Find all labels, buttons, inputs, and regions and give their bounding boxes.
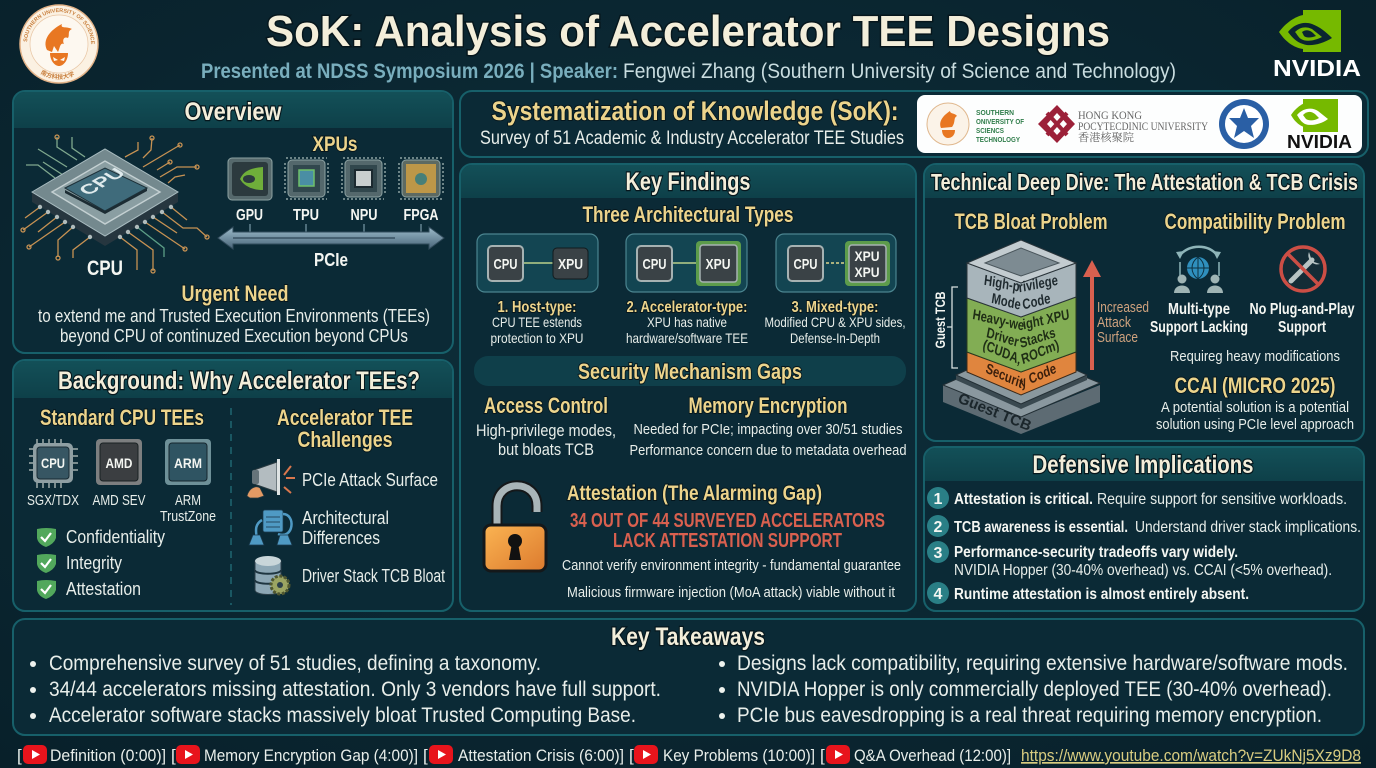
- item 3: Performance-security tradeoffs vary widely.: [954, 544, 1238, 561]
- right bullets: PCIe bus eavesdropping is a real threat requiring memory encryption.: [737, 704, 1322, 727]
- icon: NPU: [342, 158, 385, 199]
- logo: NVIDIA: [1273, 10, 1361, 81]
- diagram: accelerator-type: XPU: [706, 256, 730, 273]
- text: urgent need body: to extend me and Trusted Execution Environments (TEEs): [38, 306, 430, 326]
- labels: CPU TEEs: [27, 492, 216, 525]
- panel: technical deep dive: [923, 163, 1365, 442]
- diagram: TCB stack: Driver Stacks: [986, 327, 1056, 348]
- subtitle: Presented at NDSS Symposium 2026 | Speaker:: [201, 60, 618, 83]
- icon: multi-type support: [1174, 247, 1223, 293]
- icon: CPU chip: CPU: [74, 166, 131, 198]
- diagram: mixed-type: [776, 234, 896, 292]
- item 4: 4: [934, 586, 943, 603]
- text: no plug-and-play: Support: [1278, 319, 1327, 336]
- logo strip: NVIDIA: [1287, 132, 1352, 152]
- text: driver stack TCB bloat: Driver Stack TCB Bloat: [302, 566, 445, 586]
- band: security mechanism gaps: Security Mechanism Gaps: [578, 359, 802, 384]
- callout: 34 of 44: [570, 510, 885, 552]
- video chapters: Attestation Crisis (6:00)]: [458, 746, 624, 765]
- logo strip: SCIENCS: [976, 128, 1004, 135]
- diagram: TCB stack: Security Code: [986, 364, 1056, 390]
- panel: defensive implications: [924, 447, 1364, 611]
- heading: three architectural types: Three Architectural Types: [582, 202, 794, 227]
- icon: architecture: [249, 510, 292, 545]
- heading: key findings: Key Findings: [626, 168, 750, 196]
- check list: [37, 527, 165, 599]
- icon: SGX/TDX chip: [29, 439, 78, 488]
- label: XPUs: XPUs: [312, 133, 358, 156]
- heading: CCAI: CCAI (MICRO 2025): [1174, 373, 1336, 398]
- title: SoK: Analysis of Accelerator TEE Designs: [266, 7, 1110, 56]
- text: memory encryption body: Needed for PCIe; impacting over 30/51 studies: [634, 421, 902, 438]
- icon: SGX/TDX chip: CPU: [41, 455, 65, 471]
- item 1: [927, 487, 1347, 509]
- item 2: [927, 515, 1361, 537]
- heading: access control: Access Control: [484, 393, 608, 418]
- text: requires modifications: Requireg heavy modifications: [1170, 348, 1340, 365]
- item 3: 3: [934, 545, 943, 562]
- label: guest TCB bracket: [932, 287, 958, 368]
- diagram: TCB stack: Guest TCB: [956, 390, 1034, 435]
- text: CCAI body: [1156, 399, 1354, 433]
- text: accelerator-type: 2. Accelerator-type:: [626, 299, 748, 316]
- text: multi-type: Multi-type: [1168, 301, 1230, 318]
- icon: megaphone: [247, 459, 295, 498]
- text: architectural differences: [302, 508, 389, 548]
- icon: AMD chip: [96, 439, 142, 485]
- diagram: TCB stack: (CUDA, ROCm): [983, 340, 1059, 366]
- check list: Attestation: [66, 579, 141, 599]
- diagram: mixed-type: XPU: [854, 264, 880, 280]
- logo strip: POCYTECDINIC UNIVERSITY: [1078, 119, 1208, 133]
- diagram: host-type: CPU: [494, 256, 518, 273]
- text: host-type: [490, 299, 584, 346]
- video chapters: [: [423, 746, 428, 765]
- video chapters: Definition (0:00)]: [50, 746, 166, 765]
- heading: TCB bloat: TCB Bloat Problem: [954, 209, 1108, 234]
- text: mixed-type: Modified CPU & XPU sides,: [764, 314, 906, 330]
- labels: CPU TEEs: AMD SEV: [92, 492, 146, 509]
- icon: AMD chip: AMD: [106, 455, 132, 471]
- text: accelerator-type: [626, 299, 748, 346]
- icon: FPGA: [399, 158, 443, 199]
- video chapters: Memory Encryption Gap (4:00)]: [204, 746, 418, 765]
- labels: CPU TEEs: ARM: [175, 492, 201, 509]
- diagram: TCB stack: Heavy-weight XPU: [972, 309, 1069, 332]
- text: access control body: High-privilege modes,: [476, 421, 616, 440]
- icon: TPU: [285, 158, 328, 199]
- left bullets: Accelerator software stacks massively bloat Trusted Computing Base.: [49, 704, 636, 727]
- logo strip: ONIVERSITY OF: [976, 119, 1025, 126]
- video chapters: [: [629, 746, 634, 765]
- text: no plug-and-play: [1250, 301, 1355, 336]
- text: multi-type: [1150, 301, 1248, 336]
- labels: XPU types: TPU: [293, 207, 319, 224]
- check list: Confidentiality: [66, 527, 165, 547]
- diagram: accelerator-type: CPU: [642, 256, 666, 273]
- heading: key takeaways: Key Takeaways: [611, 623, 765, 651]
- icon: database gear: [255, 556, 289, 594]
- video chapters: [17, 745, 1361, 765]
- text: accelerator-type: XPU has native: [647, 314, 727, 330]
- labels: XPU types: [236, 207, 439, 224]
- label: increased attack surface: Attack: [1097, 314, 1131, 331]
- callout: 34 of 44: LACK ATTESTATION SUPPORT: [613, 530, 842, 552]
- heading: memory encryption: Memory Encryption: [688, 393, 848, 418]
- arrow: increased attack surface: [1083, 260, 1101, 370]
- heading: attestation gap: Attestation (The Alarming Gap): [567, 482, 822, 505]
- logo strip: TECHNOLOGY: [976, 137, 1020, 144]
- text: attestation details: Malicious firmware injection (MoA attack) viable without it: [567, 584, 896, 601]
- text: mixed-type: 3. Mixed-type:: [792, 299, 878, 316]
- text: memory encryption body: [630, 421, 906, 459]
- diagram: TCB stack: [942, 240, 1101, 435]
- text: urgent need body: beyond CPU of continuzed Execution beyond CPUs: [60, 326, 408, 346]
- diagram: mixed-type: XPU: [854, 248, 880, 264]
- subtitle: Fengwei Zhang (Southern University of Science and Technology): [623, 60, 1176, 83]
- heading: accelerator TEE challenges: [277, 405, 413, 452]
- logo: university seal: [19, 4, 99, 84]
- logo strip: HONG KONG: [1078, 108, 1142, 122]
- heading: accelerator TEE challenges: Challenges: [298, 427, 392, 452]
- icon: no plug-and-play: [1281, 247, 1325, 291]
- labels: XPU types: FPGA: [404, 207, 439, 224]
- panel: overview: [13, 91, 453, 353]
- label: PCIe: PCIe: [314, 250, 348, 270]
- heading: urgent need: Urgent Need: [182, 281, 288, 306]
- item 4: [927, 582, 1249, 604]
- text: CCAI body: A potential solution is a potential: [1161, 399, 1349, 416]
- icon: open padlock: [484, 486, 546, 571]
- video chapters: Key Problems (10:00)]: [663, 746, 815, 765]
- diagram: TCB stack: High-privilege: [984, 274, 1058, 294]
- right bullets: [719, 652, 1348, 727]
- callout: 34 of 44: 34 OUT OF 44 SURVEYED ACCELERATORS: [570, 510, 885, 532]
- text: attestation details: [562, 557, 901, 601]
- text: access control body: [476, 421, 616, 459]
- text: PCIe attack surface: PCIe Attack Surface: [302, 470, 438, 490]
- label: increased attack surface: Surface: [1097, 329, 1138, 346]
- logo strip: 香港核聚院: [1078, 129, 1134, 145]
- video chapters: [: [820, 746, 825, 765]
- left bullets: Comprehensive survey of 51 studies, defining a taxonomy.: [49, 652, 541, 675]
- left bullets: [30, 652, 661, 727]
- video chapters: [: [171, 746, 176, 765]
- icon: ARM chip: [165, 439, 211, 485]
- video chapters: [: [17, 746, 22, 765]
- item 1: Attestation is critical.: [954, 491, 1093, 508]
- subtitle: [201, 60, 1176, 83]
- heading: overview: Overview: [184, 98, 282, 126]
- icon: GPU: [228, 158, 272, 200]
- labels: XPU types: GPU: [236, 207, 263, 224]
- text: mixed-type: [764, 299, 906, 346]
- video chapters: Q&A Overhead (12:00)]: [854, 746, 1011, 765]
- label: CPU: CPU: [87, 257, 123, 280]
- item 3: [927, 541, 1332, 579]
- text: SoK subtitle: Survey of 51 Academic & Industry Accelerator TEE Studies: [480, 128, 904, 149]
- diagram: mixed-type: CPU: [794, 256, 818, 273]
- check list: Integrity: [66, 553, 122, 573]
- icon: CPU chip: [21, 135, 209, 273]
- text: accelerator-type: hardware/software TEE: [626, 330, 748, 346]
- text: multi-type: Support Lacking: [1150, 319, 1248, 336]
- text: host-type: 1. Host-type:: [498, 299, 576, 316]
- labels: CPU TEEs: SGX/TDX: [27, 492, 79, 509]
- arrow: PCIe bus: [218, 224, 444, 249]
- diagram: host-type: XPU: [558, 256, 583, 273]
- logo: university seal: 南方科技大学: [40, 70, 74, 80]
- diagram: accelerator-type: [626, 234, 747, 292]
- panel: SoK banner: [460, 91, 1368, 157]
- text: architectural differences: Architectural: [302, 508, 389, 528]
- band: security mechanism gaps: [474, 356, 906, 386]
- text: attestation details: Cannot verify environment integrity - fundamental guarantee: [562, 557, 901, 574]
- text: memory encryption body: Performance concern due to metadata overhead: [630, 442, 906, 459]
- panel: key takeaways: [13, 619, 1364, 735]
- text: urgent need body: [38, 306, 430, 346]
- panel: key findings: [460, 164, 916, 611]
- left bullets: 34/44 accelerators missing attestation. Only 3 vendors have full support.: [49, 678, 661, 701]
- text: mixed-type: Defense-In-Depth: [790, 330, 880, 346]
- label: increased attack surface: [1097, 299, 1149, 346]
- diagram: host-type: [477, 234, 598, 292]
- heading: accelerator TEE challenges: Accelerator TEE: [277, 405, 413, 430]
- item 2: TCB awareness is essential.: [954, 519, 1128, 536]
- logo: NVIDIA: NVIDIA: [1273, 55, 1361, 81]
- item 1: 1: [934, 491, 943, 508]
- item 4: Runtime attestation is almost entirely absent.: [954, 586, 1249, 603]
- labels: CPU TEEs: TrustZone: [160, 508, 216, 525]
- label: guest TCB bracket: Guest TCB: [932, 292, 948, 348]
- item 2: 2: [934, 519, 943, 536]
- panel: background: [13, 360, 453, 611]
- text: host-type: protection to XPU: [490, 330, 584, 346]
- logo strip: [917, 95, 1362, 153]
- item 1: Require support for sensitive workloads.: [1097, 491, 1347, 508]
- text: host-type: CPU TEE estends: [492, 314, 582, 330]
- heading: defensive implications: Defensive Implications: [1032, 451, 1254, 479]
- labels: XPU types: NPU: [350, 207, 378, 224]
- logo strip: SOUTHERN: [976, 110, 1014, 117]
- diagram: TCB stack: Mode Code: [992, 293, 1050, 310]
- icon: ARM chip: ARM: [174, 455, 202, 471]
- label: increased attack surface: Increased: [1097, 299, 1149, 316]
- text: access control body: but bloats TCB: [498, 440, 594, 459]
- text: architectural differences: Differences: [302, 528, 380, 548]
- heading: standard CPU TEEs: Standard CPU TEEs: [40, 405, 204, 430]
- heading: background: Background: Why Accelerator TEEs?: [58, 367, 420, 395]
- heading: SoK: Systematization of Knowledge (SoK):: [492, 96, 898, 126]
